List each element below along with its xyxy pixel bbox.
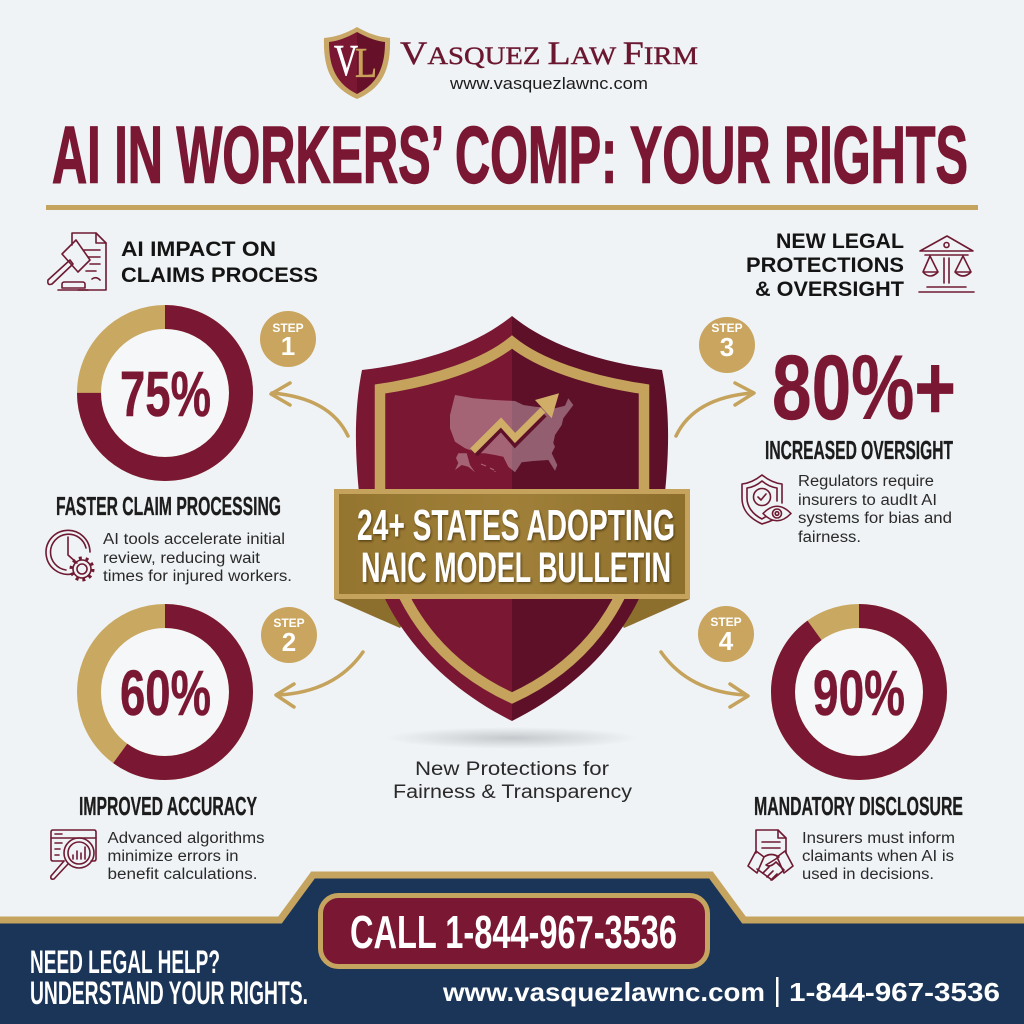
step badge 2 — [261, 607, 317, 663]
heading text: CLAIMS PROCESS — [121, 263, 318, 287]
description: benefit calculations. — [108, 866, 258, 883]
description: claimants when AI is — [802, 848, 954, 865]
center shield emblem — [334, 316, 690, 749]
heading text: NEW LEGAL — [776, 229, 904, 253]
heading text: AI IMPACT ON — [121, 237, 276, 261]
footer call to action: UNDERSTAND YOUR RIGHTS. — [30, 975, 308, 1011]
description: fairness. — [798, 529, 861, 546]
step badge 1: STEP — [272, 321, 304, 335]
arrow to step 2 — [276, 652, 363, 707]
call button — [320, 896, 708, 966]
icon: document and handshake — [748, 830, 793, 880]
footer contact: 1-844-967-3536 — [789, 977, 1000, 1007]
description: systems for bias and — [798, 510, 952, 527]
icon: analytics magnifier — [51, 830, 96, 879]
footer contact — [442, 977, 1000, 1007]
description: Insurers must inform — [802, 830, 955, 847]
description: insurers to audIt AI — [798, 492, 937, 509]
firm name: VASQUEZ LAW FIRM — [400, 36, 698, 72]
footer band — [0, 875, 1024, 1024]
big statistic 80%+: 80%+ — [772, 337, 956, 439]
shield caption: Fairness & Transparency — [393, 782, 633, 803]
arrow to step 4 — [661, 652, 748, 707]
step badge 3: STEP — [711, 321, 743, 335]
firm website: www.vasquezlawnc.com — [449, 74, 648, 93]
section title: FASTER CLAIM PROCESSING — [56, 491, 281, 521]
description: times for injured workers. — [103, 568, 292, 585]
gold banner: 24+ STATES ADOPTING — [357, 501, 675, 550]
description: used in decisions. — [802, 866, 934, 883]
US map with rising arrow — [450, 393, 573, 472]
icon: gavel and document — [48, 233, 106, 290]
heading: new legal protections and oversight — [746, 229, 974, 301]
icon: logo shield — [324, 27, 390, 99]
shield caption: New Protections for — [415, 759, 610, 780]
logo: Vasquez Law Firm — [324, 27, 698, 99]
heading text: PROTECTIONS — [746, 253, 904, 277]
icon: logo shield: L — [355, 41, 377, 87]
gold banner — [336, 492, 688, 596]
footer contact: www.vasquezlawnc.com — [442, 977, 765, 1007]
step badge 2: STEP — [273, 616, 305, 630]
donut chart: 75% — [89, 317, 241, 469]
arrow to step 3 — [676, 383, 754, 436]
panel: step 4 mandatory disclosure — [661, 606, 963, 883]
icon: courthouse with scales — [919, 236, 974, 292]
step badge 4: 4 — [719, 626, 734, 656]
panel: step 2 improved accuracy — [51, 607, 363, 883]
icon: clock with gear — [46, 530, 93, 580]
step badge 4 — [698, 606, 754, 662]
call button: CALL 1-844-967-3536 — [350, 906, 677, 958]
description: Advanced algorithms — [108, 830, 265, 847]
footer call to action: NEED LEGAL HELP? — [30, 944, 220, 980]
donut chart: 60%: 60% — [120, 657, 211, 729]
icon: logo shield: V — [334, 36, 358, 85]
arrow to step 1 — [271, 383, 348, 436]
banner tails — [334, 599, 690, 628]
icon: shield with eye — [742, 475, 791, 524]
shield body — [356, 316, 668, 721]
donut chart: 75%: 75% — [120, 358, 211, 430]
panel: step 3 increased oversight — [676, 317, 956, 546]
step badge 1 — [260, 311, 316, 367]
description: minimize errors in — [108, 848, 238, 865]
donut chart: 60% — [89, 616, 241, 768]
step badge 2: 2 — [282, 627, 296, 657]
step badge 3 — [699, 317, 755, 373]
step badge 1: 1 — [281, 331, 295, 361]
description: AI tools accelerate initial — [103, 531, 285, 548]
donut chart: 90% — [783, 616, 935, 768]
description: Regulators require — [798, 473, 934, 490]
section title: IMPROVED ACCURACY — [79, 791, 257, 821]
description: review, reducing wait — [103, 550, 261, 567]
step badge 4: STEP — [710, 615, 742, 629]
gold banner: NAIC MODEL BULLETIN — [361, 544, 671, 592]
heading text: & OVERSIGHT — [755, 277, 904, 301]
step badge 3: 3 — [720, 332, 734, 362]
heading: AI impact on claims process — [48, 233, 318, 290]
donut chart: 90%: 90% — [813, 657, 905, 729]
panel: step 1 faster claim processing — [46, 311, 348, 585]
ground shadow — [387, 727, 637, 749]
